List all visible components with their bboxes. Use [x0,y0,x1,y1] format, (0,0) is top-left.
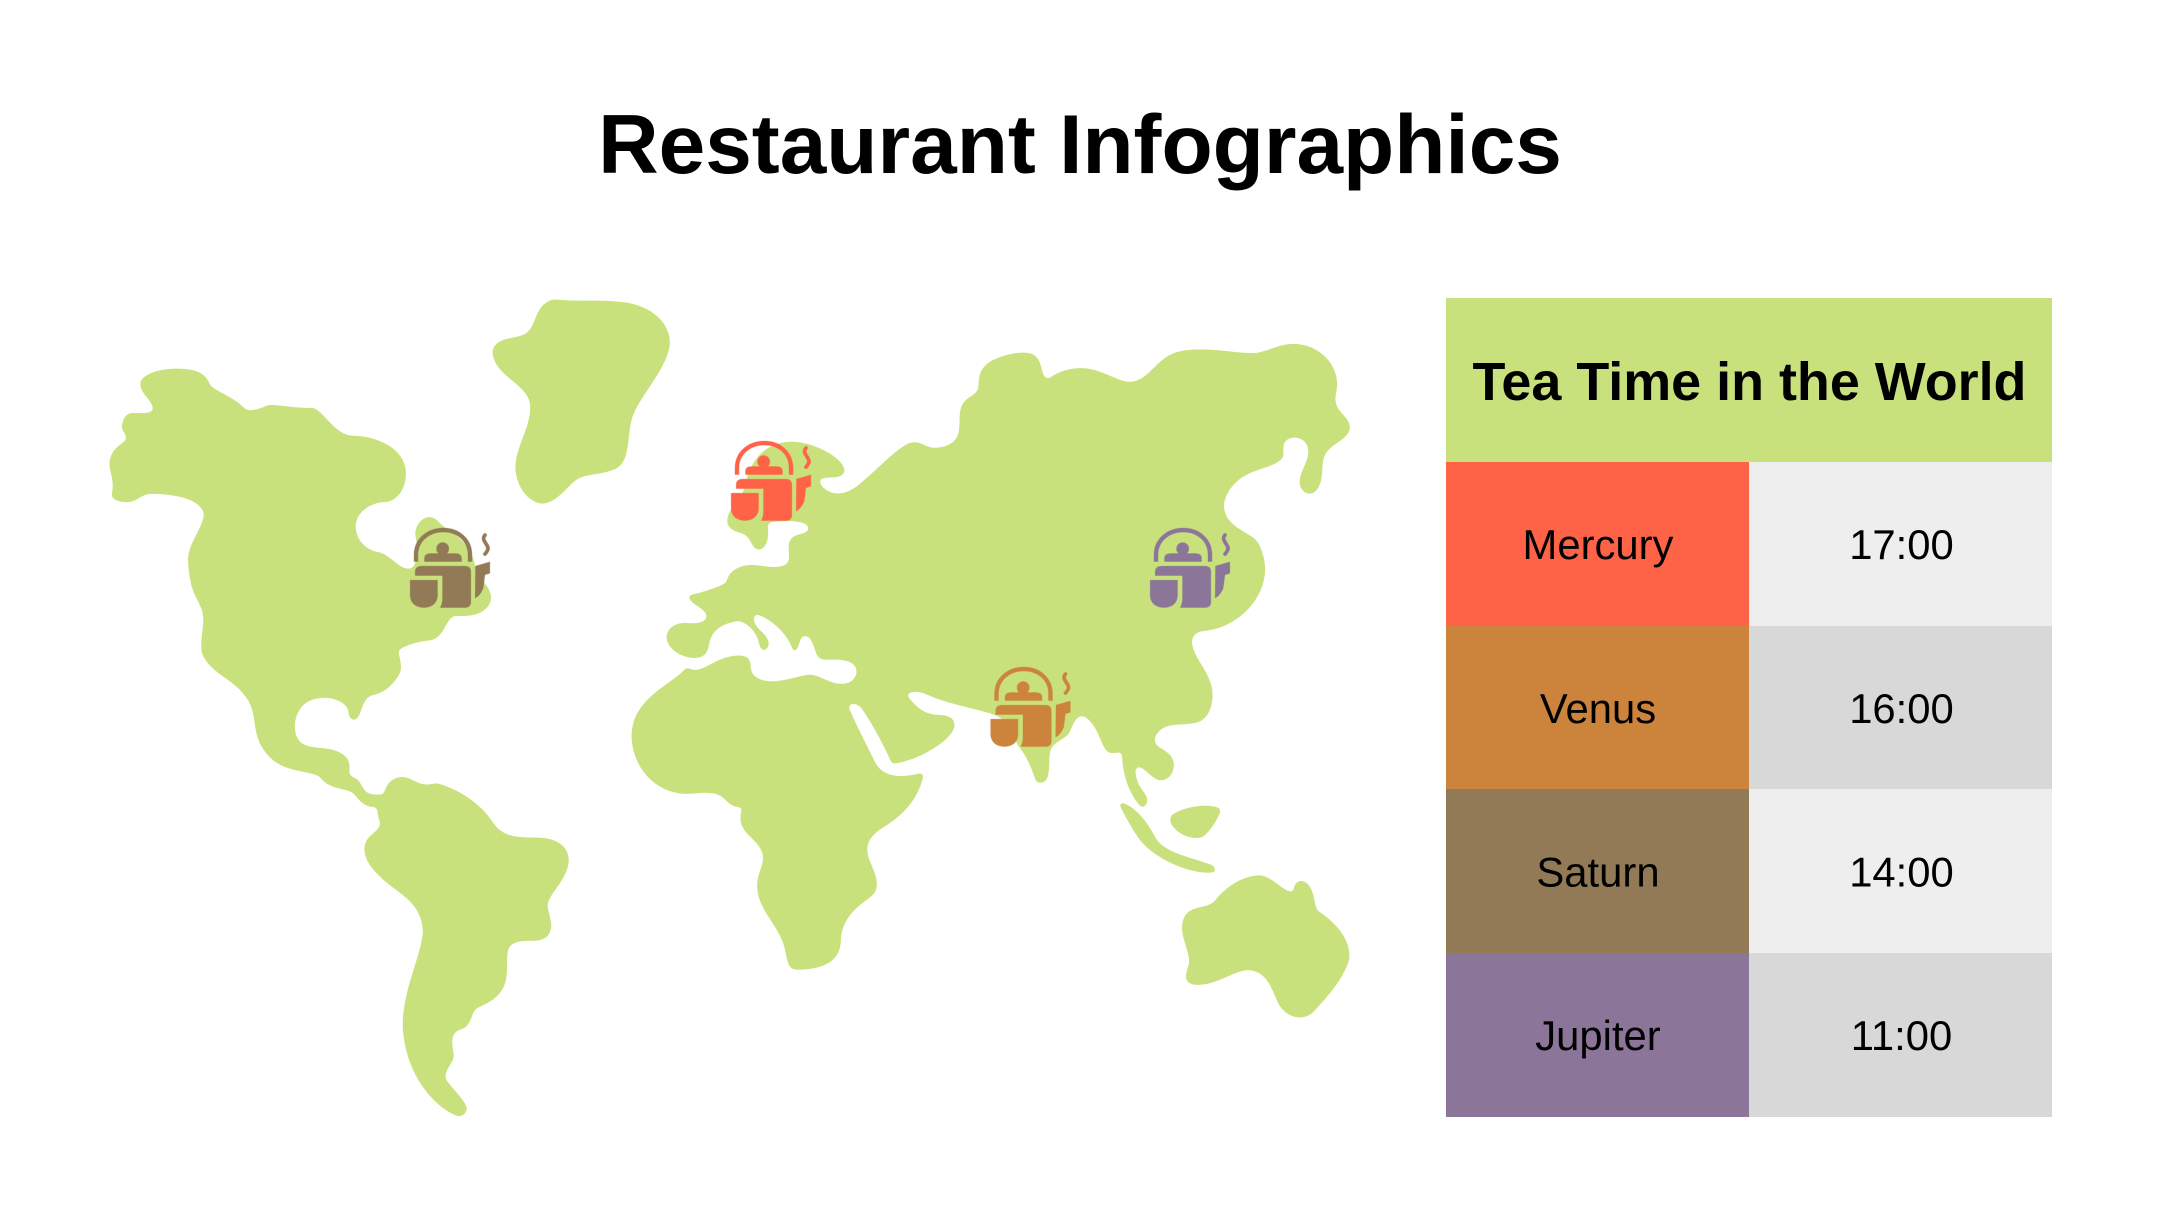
map: afro-eurasia and oceania [632,344,1350,1018]
icon: kettle Jupiter [1150,530,1230,608]
row: Jupiter: Jupiter [1535,1012,1661,1059]
table header: Tea Time in the World [1473,352,2026,412]
row: Venus: Venus [1540,685,1656,732]
world map [109,299,1350,1116]
row: Jupiter: 11:00 [1851,1012,1952,1059]
row: Venus [1446,626,2052,789]
row: Saturn: Saturn [1536,848,1660,896]
row: Saturn [1446,789,2052,953]
icon: kettle Mercury [731,443,811,521]
title: Restaurant Infographics [598,97,1562,191]
map: americas [109,299,670,1116]
table header [1446,298,2052,462]
row: Mercury: Mercury [1523,521,1674,568]
row: Mercury: 17:00 [1849,521,1954,568]
row: Jupiter [1446,953,2052,1117]
table: tea time in the world [1446,298,2052,1117]
icon: kettle Saturn [410,530,490,608]
icon: kettle Venus [990,669,1070,747]
row: Venus: 16:00 [1849,685,1954,732]
row: Saturn: 14:00 [1849,848,1954,896]
row: Mercury [1446,462,2052,626]
